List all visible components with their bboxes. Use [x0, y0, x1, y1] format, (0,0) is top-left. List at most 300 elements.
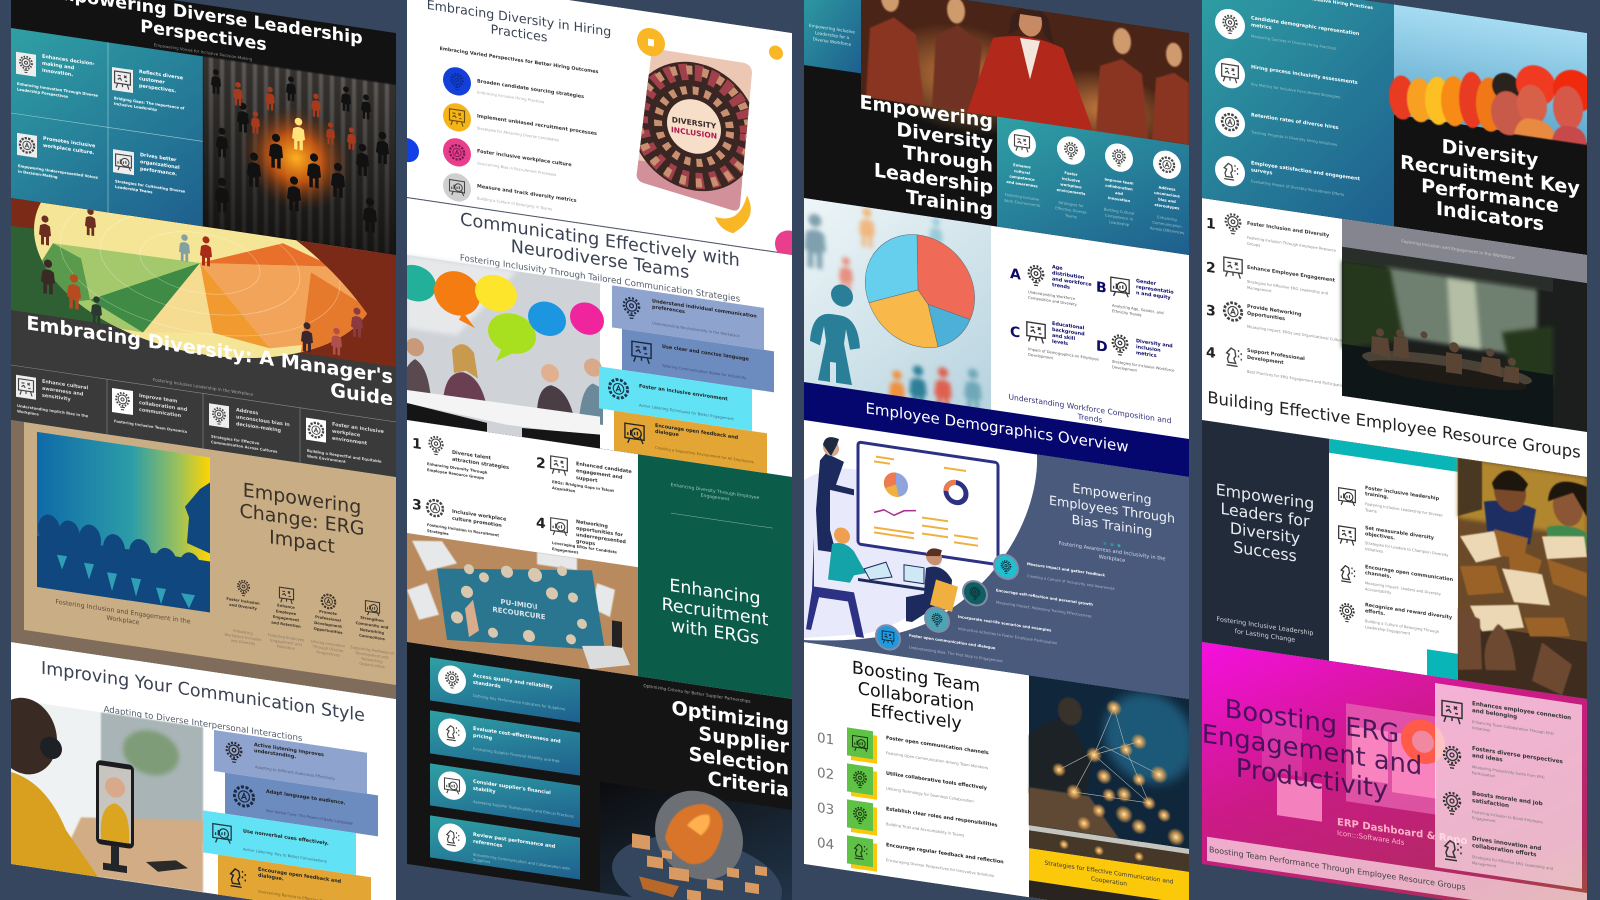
item: development: Professional — [315, 615, 341, 623]
item: community — [350, 598, 394, 671]
item: development: Support Professional — [1247, 348, 1305, 362]
item: 04: 04 — [817, 835, 834, 853]
title: Empowering — [860, 90, 993, 133]
item: inclusive culture: workplace culture. — [43, 143, 94, 156]
item: inclusive environment: environment — [332, 436, 368, 447]
item: unconscious bias: bias and — [1158, 197, 1176, 204]
item: unconscious bias: Communication Across Cultures — [211, 440, 278, 454]
item: inclusive culture: Empowering Underrepresented Voices — [18, 164, 98, 180]
title: Empowering — [243, 478, 361, 519]
card: communication preferences: preferences — [652, 304, 685, 315]
item: education: and skill — [1052, 333, 1075, 342]
item: morale: Engagement — [1472, 816, 1496, 824]
item: inclusive environments: Teams — [1064, 214, 1077, 219]
title: Communicating Effectively with — [460, 210, 740, 271]
subtitle: Embracing Varied Perspectives for Better Hiring Outcomes — [440, 46, 599, 75]
panel: training pillars — [997, 117, 1189, 255]
item: inclusive culture — [443, 136, 572, 183]
item: 03: 03 — [817, 800, 834, 818]
item: networking: Networking — [576, 519, 608, 530]
subtitle: Enhancing Diversity Through Employee — [671, 483, 759, 501]
panel: four actions — [11, 364, 396, 463]
photo: network of lights — [1029, 675, 1194, 900]
card: open feedback: dialogue — [655, 429, 679, 438]
item: networking: groups — [576, 539, 595, 547]
item: candidate engagement: support — [576, 475, 598, 484]
poster: diversity and inclusion circle — [630, 39, 758, 218]
item: inclusion: and Diversity — [231, 639, 256, 646]
footer bar — [1207, 837, 1587, 900]
card: active listening: Active listening improves — [254, 742, 324, 758]
photo: network of lights: Cooperation — [1091, 876, 1127, 888]
item: unconscious bias — [1150, 148, 1184, 235]
item: collaboration: Improve team — [1104, 177, 1134, 186]
item: development: Development — [314, 621, 342, 629]
item: community: Opportunities — [359, 662, 385, 669]
item: culture promotion: Strategies — [427, 529, 449, 536]
photo: HR network on desk — [407, 533, 638, 676]
photo: team assembling puzzle — [1458, 458, 1587, 699]
title: Training — [906, 185, 993, 221]
photo: logistics globe — [600, 777, 792, 900]
slide: Communicating Effectively with Neurodiverse Teams — [394, 196, 792, 477]
item: performance: Strategies for Cultivating Diverse — [115, 179, 185, 194]
card: active listening — [214, 730, 367, 794]
item: decision-making: Leadership Perspectives — [17, 87, 69, 99]
item: self-reflection: Measuring Impact: Assessing Training Effectiveness — [996, 600, 1091, 619]
item: team collaboration — [112, 388, 188, 434]
item: 03 — [817, 795, 998, 854]
item: age distribution — [1010, 258, 1092, 309]
item: engagement: Retention — [277, 644, 296, 651]
photo: HR network on desk: PU-IMIO\I — [501, 597, 537, 611]
item: education: background — [1052, 327, 1085, 338]
item: 02: 02 — [817, 765, 834, 783]
item: cultural competence: Enhance — [1013, 163, 1031, 170]
item: networking: opportunities for — [576, 526, 623, 539]
item: team collaboration: communication — [139, 407, 182, 419]
item: inclusive environments: Effective Diverse — [1055, 206, 1087, 215]
item: education: Impact of Demographics on Employee — [1028, 347, 1099, 362]
panel: KPI list — [1202, 0, 1394, 226]
decoration: coloured circles — [395, 0, 805, 263]
title band — [804, 382, 1189, 477]
subtitle: Trends — [1077, 412, 1102, 425]
subtitle: Engagement — [701, 492, 730, 503]
subtitle: Understanding Workforce Composition and — [1008, 392, 1172, 425]
item: cultural competence: competence — [1009, 174, 1035, 182]
card: references: Suppliers — [473, 858, 490, 864]
item: development: Perspectives — [316, 650, 340, 658]
item: community: Community and — [356, 621, 389, 630]
item: culture promotion: Inclusive workplace — [452, 509, 506, 523]
item: connection: Enhancing Team Collaboration Through ERG — [1472, 720, 1554, 736]
item: community: Networking — [361, 657, 383, 664]
item: innovation: Management — [1472, 861, 1497, 869]
title: Performance — [1421, 174, 1559, 217]
item: open communication: Accountability — [1365, 587, 1392, 595]
panel: teal tag: Leadership for a — [815, 30, 849, 40]
item: education: Development — [1028, 353, 1053, 360]
item: inclusive environment: Work Environment — [307, 454, 346, 464]
item: satisfaction surveys: Evaluating Impact of Diversity Recruitment Efforts — [1251, 179, 1344, 197]
title: Supplier — [698, 722, 789, 758]
item: development: Opportunities — [314, 627, 343, 635]
item: collaboration: and — [1115, 191, 1123, 196]
item: 01 — [817, 723, 989, 780]
item: cultural awareness — [16, 374, 88, 418]
item: performance — [113, 149, 185, 194]
title: Guide — [330, 378, 393, 411]
card: references: Streamlining Communication and Collaboration with — [473, 853, 570, 871]
item: development: Through Diverse — [312, 645, 344, 653]
item: decision-making: innovation. — [42, 68, 73, 78]
item: age distribution: Composition and Diversity — [1028, 296, 1078, 307]
title: Engagement and — [1202, 719, 1422, 782]
item: recognize efforts: Recognize and reward diversity — [1365, 602, 1452, 621]
item: measurable objectives: objectives. — [1365, 531, 1395, 542]
item: real-life scenarios: Interactive Activities to Foster Employee Participation — [958, 627, 1058, 646]
item: team collaboration: Fostering Inclusive Team Dynamics — [114, 419, 188, 434]
accents — [1329, 439, 1458, 680]
item: retention rates: Retention rates of diverse hires — [1251, 112, 1339, 131]
item: engagement: Strategies for Effective ERG Leadership and — [1247, 280, 1328, 296]
card: financial stability — [430, 763, 580, 828]
item: inclusion — [1206, 210, 1337, 259]
item: unconscious bias: Address — [236, 407, 258, 417]
subtitle: Adapting to Diverse Interpersonal Interactions — [104, 705, 303, 744]
panel: benefits grid — [11, 28, 203, 226]
item: diversity metrics — [1096, 332, 1175, 378]
title: Diversity — [896, 118, 993, 155]
item: cultural awareness: sensitivity — [42, 393, 71, 403]
subtitle: Optimizing Criteria for Better Supplier Partnerships — [643, 683, 751, 704]
item: networking: Engagement — [552, 547, 578, 555]
item: unconscious bias: Address — [1159, 185, 1175, 192]
item: 02: Utilizing Technology for Seamless Collaboration — [886, 787, 974, 804]
item: decision-making: making and — [42, 61, 75, 71]
item: decision-making: Enhances decision- — [42, 54, 95, 67]
item: inclusion: 1 — [1206, 216, 1216, 233]
item: diversity metrics: Building a Culture of Belonging in Teams — [477, 196, 552, 211]
card: active listening: Adapting to Different Audiences Effectively — [255, 765, 335, 781]
item: decision-making: Enhancing Innovation Through Diverse — [17, 82, 98, 98]
item: community: Strengthen — [360, 616, 384, 623]
item: cultural awareness: Workplace — [17, 409, 39, 417]
item: inclusion: Enhancing — [233, 629, 253, 636]
item: unbiased recruitment: Implement unbiased recruitment processes — [477, 113, 597, 137]
item: diversity metrics: Diversity and — [1136, 338, 1173, 350]
item: unbiased recruitment — [443, 101, 597, 152]
item: engagement — [268, 585, 305, 653]
item: engagement: Enhance Employee Engagement — [1247, 265, 1336, 284]
card: communication preferences: Understand individual communication — [652, 298, 757, 320]
banner: subtitle — [1342, 219, 1587, 283]
item: culture promotion: culture promotion — [452, 516, 502, 529]
item: inclusive environment — [306, 418, 384, 463]
title: Improving Your Communication Style — [41, 659, 365, 726]
slide: Empowering Employees Through Bias Training — [804, 420, 1189, 699]
slide: Employee Demographics Overview — [804, 198, 1189, 477]
item: leadership training: Foster inclusive leadership — [1365, 485, 1439, 502]
item: recognize efforts — [1340, 598, 1453, 642]
panel: green title panel — [638, 454, 792, 699]
subtitle: Fostering Inclusivity Through Tailored Communication Strategies — [460, 253, 741, 305]
photo: network of lights: Strategies for Effective Communication and — [1045, 860, 1173, 886]
item: talent attraction: Enhancing Diversity Through — [427, 462, 487, 475]
item: development: Promote — [319, 610, 337, 616]
item: talent attraction: 1 — [412, 436, 422, 453]
slide: Boosting ERG Engagement and Productivity — [1202, 642, 1587, 900]
title: Building Effective Employee Resource Groups — [1207, 388, 1581, 462]
card: cost — [430, 710, 580, 776]
item: performance: organizational — [140, 159, 180, 171]
title: Selection — [689, 742, 789, 780]
photo: HR network on desk: RECOURCURE — [492, 605, 546, 622]
item: 02: Utilize collaborative tools effectively — [886, 771, 988, 792]
item: unbiased recruitment: Strategies for Attracting Diverse Candidates — [477, 126, 559, 142]
title: Empowering — [1072, 481, 1152, 508]
item: education: Educational — [1052, 321, 1084, 331]
item: performance: Drives better — [140, 152, 176, 163]
item: unconscious bias: stereotypes — [1155, 203, 1180, 211]
item: customer perspectives: perspectives. — [139, 83, 176, 94]
item: leadership training — [1339, 481, 1443, 524]
card: nonverbal cues: Use nonverbal cues effectively. — [243, 828, 329, 847]
title: Leaders for — [1220, 499, 1310, 531]
title: Impact — [269, 525, 335, 558]
item: open communication: Encourage open communication — [1365, 564, 1453, 583]
item: inclusive environments: Strategies for — [1058, 201, 1084, 208]
item: unconscious bias: decision-making — [236, 421, 282, 434]
item: inclusive environment: workplace — [332, 429, 361, 439]
photo: woman recording with phone — [0, 693, 203, 892]
title: Enhancing — [669, 576, 761, 609]
title: with ERGs — [671, 616, 759, 649]
item: cultural competence: cultural — [1014, 169, 1030, 175]
chart: pie — [865, 227, 975, 355]
card: nonverbal cues — [203, 810, 356, 875]
title: Optimizing — [671, 696, 789, 737]
item: cultural awareness: Enhance cultural — [42, 379, 88, 391]
item: morale — [1444, 787, 1543, 831]
item: customer perspectives: Inclusive Leadership — [114, 102, 157, 112]
item: inclusion: Workplace Inclusion — [225, 633, 262, 642]
item: engagement: Enhance — [277, 603, 295, 610]
title: Indicators — [1436, 197, 1544, 236]
item: perspectives: Fosters diverse perspectives — [1472, 746, 1563, 765]
item: gender representation: Gender — [1136, 278, 1156, 287]
item: development — [311, 592, 346, 659]
item: 04 — [817, 831, 1004, 891]
title: Neurodiverse Teams — [511, 237, 689, 283]
card: adapt language: Non-Verbal Cues: The Power of Body Language — [266, 809, 354, 826]
decoration: crescent — [715, 191, 751, 236]
item: education — [1010, 315, 1099, 367]
item: engagement: and Retention — [271, 621, 301, 629]
item: networking: 3 — [1206, 303, 1216, 320]
item: gender representation: representatio — [1136, 284, 1174, 296]
item: innovation: collaboration efforts — [1472, 843, 1537, 859]
item: 04: Encouraging Diverse Perspectives for Innovative Solutions — [886, 858, 994, 878]
item: retention rates: Tracking Progress in Diversity Hiring Initiatives — [1250, 130, 1337, 147]
item: community: Connections — [359, 634, 386, 641]
item: inclusion — [225, 578, 262, 647]
title: Boosting ERG — [1225, 694, 1399, 750]
item: satisfaction surveys — [1215, 154, 1361, 205]
title: Boosting Team — [852, 658, 980, 697]
item: gender representation: B — [1096, 279, 1107, 297]
item: measure impact — [993, 552, 1115, 596]
item: demographic metrics — [1215, 7, 1360, 58]
item: measurable objectives: Initiatives — [1365, 547, 1383, 554]
item: leadership training: Fostering Inclusive Leadership for Diverse — [1365, 502, 1443, 518]
item: perspectives: and ideas — [1472, 753, 1503, 764]
title: Productivity — [1236, 753, 1388, 806]
item: talent attraction: attraction strategies — [452, 457, 509, 471]
item: recognize efforts: efforts. — [1365, 608, 1385, 617]
item: inclusivity assessments — [1215, 56, 1358, 107]
item: measure impact: Creating a Culture of Inclusivity and Awareness — [1027, 574, 1115, 591]
card: references — [430, 815, 580, 880]
poster: diversity and inclusion circle: DIVERSITY — [672, 115, 716, 131]
slide: Empowering Diverse Leadership Perspectives — [11, 0, 396, 255]
item: talent attraction: Diverse talent — [452, 450, 491, 461]
item: gender representation: Analyzing Age, Gender, and — [1112, 304, 1164, 315]
slide: Empowering Diversity Through Leadership Training — [804, 0, 1189, 255]
item: diversity metrics: metrics — [1136, 350, 1157, 359]
item: age distribution: trends — [1052, 282, 1070, 291]
card: quality: standards — [473, 680, 501, 690]
title: Collaboration — [858, 679, 974, 716]
item: inclusion: Groups — [1247, 242, 1260, 248]
photo: meeting in a forest pavilion — [1342, 247, 1587, 432]
item: candidate engagement: Acquisition — [552, 486, 576, 493]
item: inclusion: Fostering Inclusion Through Employee Resource — [1247, 236, 1336, 253]
item: 01: Foster open communication channels — [886, 735, 989, 756]
item: connection: Initiatives — [1472, 726, 1490, 733]
card: open feedback — [218, 855, 371, 900]
title: Perspectives — [140, 17, 267, 55]
subtitle: Fostering Inclusive Leadership in the Workplace — [153, 377, 254, 397]
photo: row of colourful heads — [1389, 4, 1595, 148]
item: networking: 4 — [536, 515, 546, 533]
panel: teal tag — [804, 0, 861, 73]
item: inclusion: and Diversity — [229, 603, 257, 611]
item: retention rates — [1215, 105, 1339, 153]
item: sourcing — [443, 65, 584, 114]
item: inclusivity assessments: Key Metrics for Inclusive Recruitment Strategies — [1251, 82, 1340, 99]
item: networking: Opportunities — [1247, 311, 1285, 322]
slide: Improving Your Communication Style — [0, 639, 396, 900]
item: diversity metrics: inclusion — [1136, 344, 1161, 354]
item: talent attraction — [412, 433, 509, 484]
item: networking: Measuring Impact: ERGs and Organizational Culture — [1247, 325, 1344, 343]
item: networking: underrepresented — [576, 532, 626, 545]
item: networking: Provide Networking — [1247, 304, 1302, 318]
card: quality: Defining Key Performance Indicators for Suppliers — [473, 694, 565, 711]
item: community: Development and — [355, 651, 389, 660]
item: diversity metrics: Development — [1112, 365, 1137, 373]
item: inclusive culture: Promotes inclusive — [43, 136, 95, 149]
item: inclusive culture — [17, 132, 98, 179]
panel: dark title — [1202, 420, 1329, 661]
item: demographic metrics: Candidate demographic representation — [1251, 15, 1359, 37]
slide: Boosting Team Collaboration Effectively — [804, 642, 1194, 900]
title: Diversity — [1230, 519, 1300, 548]
item: open communication — [875, 623, 1003, 667]
poster: diversity and inclusion circle: INCLUSION — [671, 125, 717, 141]
dots — [1104, 542, 1120, 547]
card: financial stability: Consider supplier's financial — [473, 779, 551, 796]
card: financial stability: stability — [473, 786, 496, 795]
item: gender representation — [1096, 272, 1174, 322]
item: connection — [1442, 697, 1571, 745]
background dashboard image — [1262, 691, 1468, 856]
item: perspectives — [1444, 742, 1563, 788]
title: Employees Through — [1049, 494, 1175, 527]
title: Empowering — [1216, 480, 1314, 513]
item: open communication: Measuring Impact: Leaders and Diversity — [1365, 581, 1441, 596]
item: leadership training: Teams — [1364, 508, 1377, 514]
item: inclusive environments — [1055, 134, 1087, 221]
item: culture promotion: 3 — [412, 497, 422, 514]
item: engagement: 2 — [1206, 260, 1216, 277]
item: age distribution: A — [1010, 266, 1021, 284]
card: financial stability: Assessing Supplier Sustainability and Ethical Practices — [473, 800, 574, 819]
subtitle: Fostering Inclusion and Engagement in the — [55, 599, 191, 626]
item: collaboration: innovation — [1108, 196, 1130, 203]
slide: Embracing Diversity in Hiring Practices — [395, 0, 805, 263]
card: quality: Access quality and reliability — [473, 673, 553, 691]
item: unconscious bias: Strategies for Effective — [211, 435, 259, 446]
item: inclusive environments: inclusive — [1062, 177, 1081, 183]
item: engagement: Fostering Employee — [268, 633, 304, 642]
item: connection: and belonging — [1472, 708, 1517, 721]
item: inclusive environments: Foster — [1064, 171, 1078, 177]
item: recognize efforts: Building a Culture of Belonging Through — [1365, 619, 1439, 634]
card: active listening: understanding. — [254, 748, 296, 760]
item: customer perspectives: Reflects diverse — [139, 69, 183, 81]
card: inclusive environment — [599, 366, 752, 431]
title: Recruitment Key — [1400, 150, 1580, 200]
card: references: Review past performance and — [473, 832, 555, 850]
card: adapt language — [225, 773, 378, 836]
item: development: 4 — [1206, 345, 1216, 362]
item: connection: Enhances employee connection — [1472, 701, 1571, 722]
title: Recruitment — [662, 595, 769, 630]
item: engagement: Engagement and — [270, 638, 302, 647]
item: development: Development — [1247, 355, 1284, 366]
card: open feedback — [614, 411, 767, 473]
item: open communication: channels. — [1365, 570, 1391, 580]
item: performance: Leadership Teams — [115, 185, 153, 195]
subtitle: Fostering Inclusive Leadership — [1217, 615, 1313, 637]
item: cultural competence: Work Environments — [1004, 199, 1040, 208]
panel: teal tag: Diverse Workforce — [813, 36, 852, 47]
title: Through — [903, 141, 993, 177]
illustration: team around a dashboard — [804, 420, 1037, 674]
item: demographic metrics: metrics — [1251, 22, 1272, 31]
item: networking — [536, 513, 626, 562]
item: networking — [1206, 298, 1344, 343]
card: inclusive environment: Foster an inclusive environment — [639, 383, 728, 403]
item: talent attraction: Employee Resource Groups — [427, 468, 485, 481]
item: sourcing: Embracing Inclusive Hiring Practices — [477, 90, 544, 104]
slide: Enhancing Recruitment with ERGs — [407, 420, 792, 699]
item: gender representation: Ethnicity Trends — [1112, 309, 1141, 317]
item: engagement — [1206, 254, 1336, 303]
